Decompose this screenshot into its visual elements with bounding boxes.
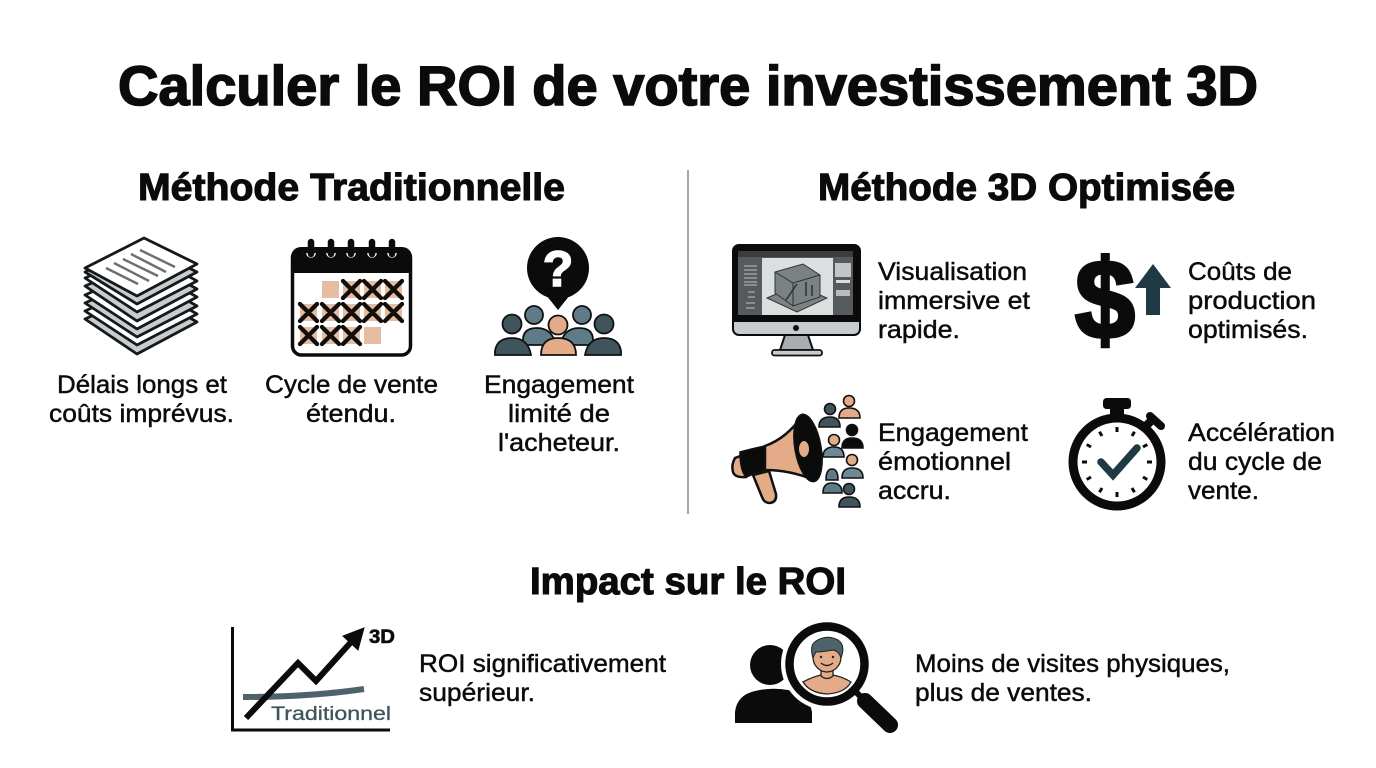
- icon: monitor with 3D model: [733, 245, 860, 356]
- icon: paper stack: [85, 238, 197, 354]
- text: visualisation: [878, 258, 1030, 344]
- text: délais: coûts imprévus.: [49, 400, 234, 428]
- heading: méthode traditionnelle: Méthode Traditionnelle: [138, 167, 565, 209]
- icon: calendar: [291, 242, 412, 355]
- chart: ROI 3D vs traditionnel: [232, 627, 395, 730]
- text: engagement limité: l'acheteur.: [498, 429, 620, 457]
- text: engagement émotionnel: accru.: [878, 477, 951, 505]
- text: ROI significativement: supérieur.: [419, 679, 535, 707]
- chart: ROI 3D vs traditionnel: 3D: [369, 627, 395, 648]
- text: coûts de production: production: [1188, 287, 1316, 315]
- icon: audience with question bubble: [495, 237, 621, 355]
- text: engagement limité: [484, 371, 634, 457]
- text: coûts de production: optimisés.: [1188, 316, 1308, 344]
- text: coûts de production: Coûts de: [1188, 258, 1292, 286]
- text: cycle de vente: [265, 371, 438, 428]
- text: engagement limité: Engagement: [484, 371, 634, 399]
- text: engagement émotionnel: émotionnel: [878, 448, 1011, 476]
- text: moins de visites: Moins de visites physiques,: [915, 650, 1230, 678]
- text: cycle de vente: Cycle de vente: [265, 371, 438, 399]
- text: engagement émotionnel: [878, 419, 1028, 505]
- text: engagement émotionnel: Engagement: [878, 419, 1028, 447]
- text: visualisation: rapide.: [878, 316, 960, 344]
- icon: stopwatch with check: [1073, 398, 1161, 506]
- text: moins de visites: plus de ventes.: [915, 679, 1092, 707]
- icon: audience with question bubble: ?: [543, 241, 573, 297]
- text: accélération: [1188, 419, 1335, 505]
- icon: dollar and up arrow: $: [1075, 237, 1135, 362]
- icon: magnifier over person: [735, 618, 890, 725]
- text: visualisation: Visualisation: [878, 258, 1027, 286]
- text: ROI significativement: ROI significativement: [419, 650, 666, 678]
- text: moins de visites: [915, 650, 1230, 707]
- text: accélération: Accélération: [1188, 419, 1335, 447]
- heading: impact sur le ROI: Impact sur le ROI: [530, 561, 846, 603]
- text: accélération: du cycle de: [1188, 448, 1322, 476]
- text: engagement limité: limité de: [508, 400, 610, 428]
- heading: méthode 3D optimisée: Méthode 3D Optimisée: [818, 167, 1235, 209]
- text: cycle de vente: étendu.: [306, 400, 396, 428]
- icon: megaphone and crowd: [732, 396, 863, 507]
- text: ROI significativement: [419, 650, 666, 707]
- chart: ROI 3D vs traditionnel: Traditionnel: [271, 704, 391, 725]
- text: délais: [49, 371, 234, 428]
- text: coûts de production: [1188, 258, 1316, 344]
- title: Calculer le ROI de votre investissement 3D: [118, 54, 1258, 117]
- text: délais: Délais longs et: [57, 371, 227, 399]
- icon: dollar and up arrow: [1075, 237, 1171, 362]
- text: accélération: vente.: [1188, 477, 1259, 505]
- text: visualisation: immersive et: [878, 287, 1030, 315]
